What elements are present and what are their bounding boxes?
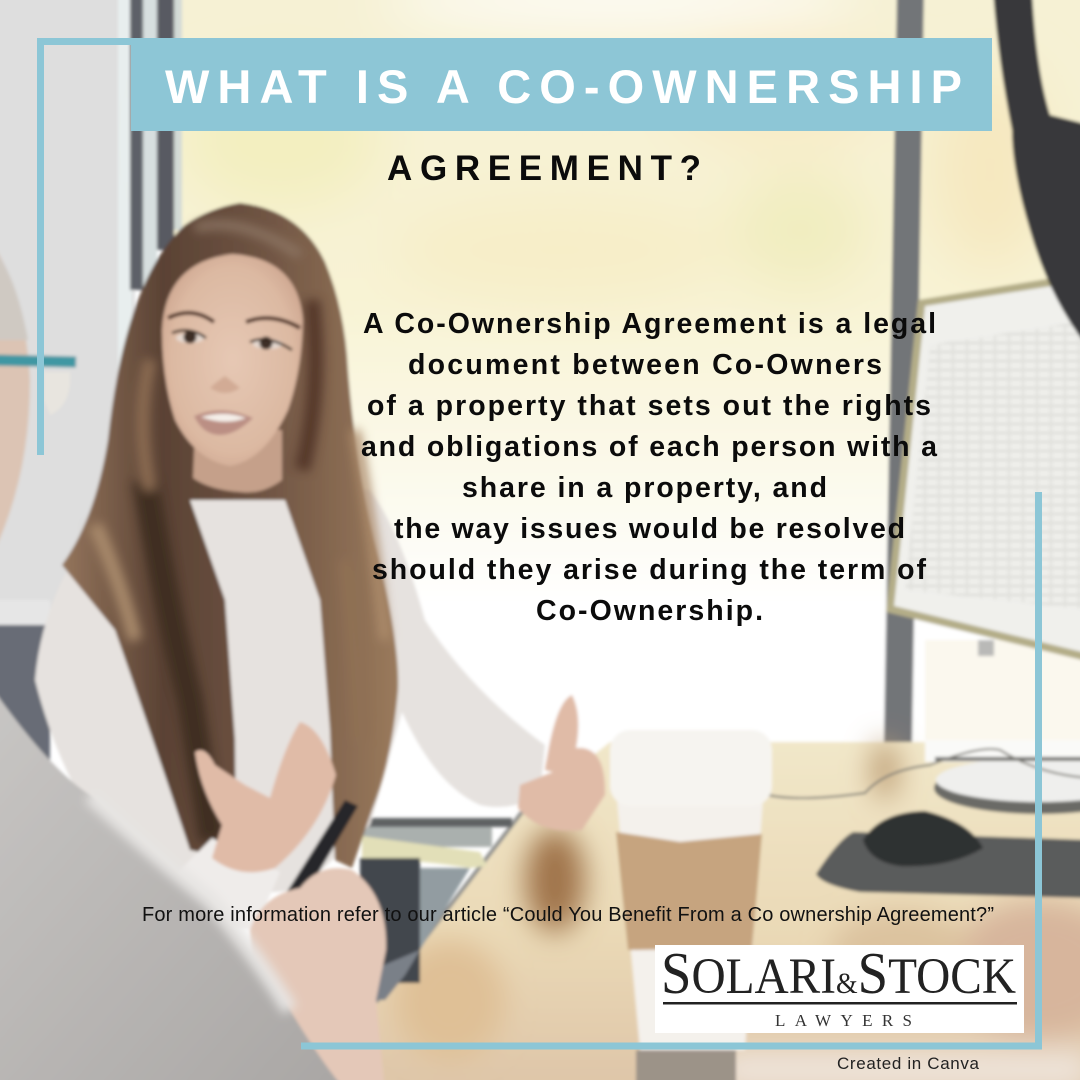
woman: right hand — [518, 695, 605, 831]
article reference note: For more information refer to our article “Could You Benefit From a Co ownership Agreement?” — [142, 904, 994, 926]
Canva credit: Created in Canva — [837, 1054, 980, 1073]
body paragraph: and obligations of each person with a — [361, 431, 938, 463]
foreground person: head and glasses — [0, 240, 76, 560]
woman: back hair — [62, 203, 398, 868]
woman: facial features — [168, 313, 300, 435]
chair at far left — [0, 625, 50, 765]
logo: Solari & Stock Lawyers — [655, 940, 1024, 1033]
body paragraph: share in a property, and — [462, 472, 827, 504]
woman: left hand with cuff — [160, 722, 336, 930]
body paragraph: the way issues would be resolved — [394, 513, 905, 545]
body paragraph: document between Co-Owners — [408, 349, 882, 381]
mouse pad and mouse — [816, 811, 1080, 898]
window view: autumn foliage — [170, 0, 1080, 760]
decorative frame: top left — [40, 42, 131, 455]
woman: white sweater — [35, 485, 545, 900]
woman: hair strands — [95, 225, 385, 840]
desk metal edge — [376, 812, 522, 1002]
title banner — [131, 38, 992, 131]
pale area below monitor — [925, 640, 1080, 750]
body paragraph — [361, 308, 938, 627]
body paragraph: Co-Ownership. — [536, 595, 763, 627]
desk — [375, 742, 1080, 1080]
office chair behind woman — [360, 818, 512, 1000]
woman: neck — [193, 430, 282, 492]
monitor stand — [925, 740, 1080, 814]
window frame, left — [130, 0, 182, 290]
decorative frame: bottom right — [301, 492, 1038, 1046]
woman: face — [162, 254, 303, 466]
title line 1: WHAT IS A CO-OWNERSHIP — [165, 60, 962, 113]
logo: Solari & Stock Lawyers: LAWYERS — [775, 1011, 912, 1030]
body paragraph: of a property that sets out the rights — [367, 390, 931, 422]
body paragraph: should they arise during the term of — [372, 554, 926, 586]
cable — [768, 749, 1080, 798]
computer monitor — [886, 272, 1080, 662]
foreground person: grey sleeve — [0, 685, 345, 1080]
person silhouette at upper right — [993, 0, 1080, 350]
window frame, right — [884, 0, 924, 742]
title line 2: AGREEMENT? — [387, 149, 701, 188]
body paragraph: A Co-Ownership Agreement is a legal — [363, 308, 936, 340]
wall at left — [0, 0, 135, 640]
foreground person: hand and pen — [250, 800, 386, 1080]
logo: Solari & Stock Lawyers: SOLARI&STOCK — [661, 940, 1016, 1006]
coffee cup — [610, 730, 772, 1080]
